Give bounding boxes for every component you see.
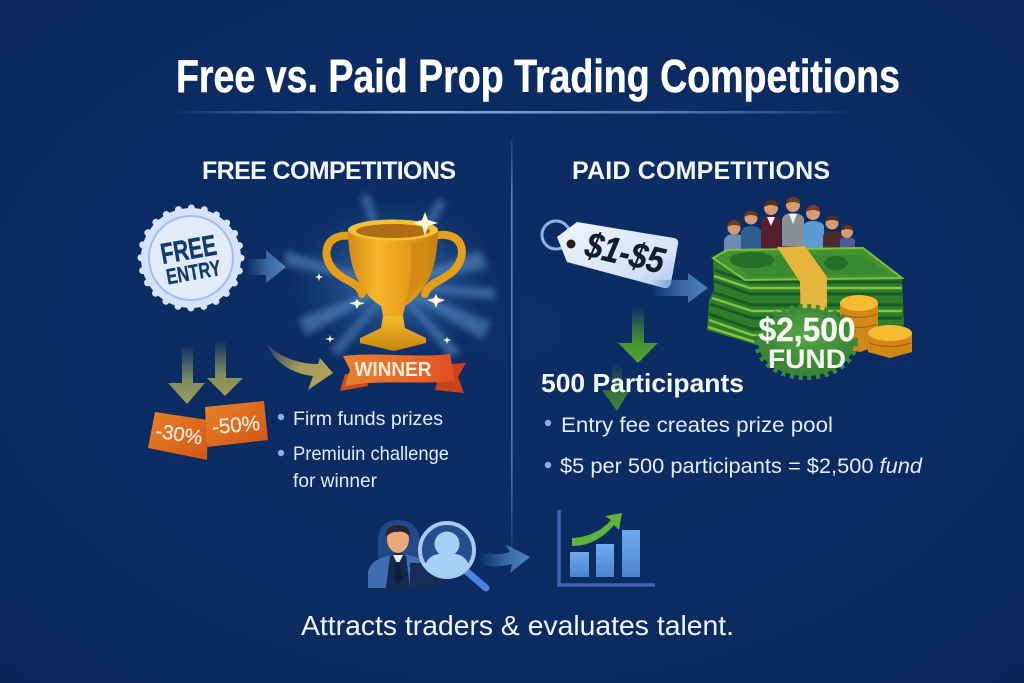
heading: free competitions: FREE COMPETITIONS	[202, 157, 456, 185]
caption: Attracts traders & evaluates talent.	[301, 610, 734, 641]
banner: winner	[340, 354, 466, 393]
trophy handles	[327, 236, 362, 294]
arrow: price tag to fund	[650, 273, 708, 303]
panel: free competitions	[141, 157, 498, 492]
heading: paid competitions: PAID COMPETITIONS	[572, 157, 830, 185]
icon: gold coins	[840, 295, 912, 358]
badge: 2500 fund: FUND	[768, 344, 846, 374]
footer flow	[301, 510, 734, 641]
tag: minus 50 percent	[205, 401, 268, 447]
bullet list: paid: $5 per 500 participants = $2,500 fund	[560, 454, 923, 478]
icon: magnifying glass	[420, 523, 486, 588]
icon: price tag: $1-$5	[581, 223, 670, 282]
arrow: trader to chart	[479, 544, 530, 573]
arrow: free entry to trophy	[246, 250, 286, 283]
trophy base	[360, 316, 426, 351]
panel: paid competitions	[541, 157, 923, 478]
icon: free entry badge: ENTRY	[164, 255, 223, 289]
bar chart	[559, 510, 655, 585]
bullet list: paid	[545, 413, 923, 478]
bullet list: paid: Entry fee creates prize pool	[561, 413, 833, 437]
trophy cup	[348, 229, 438, 325]
bullet list: free: Firm funds prizes	[293, 408, 443, 430]
bullet list: free: Premiuin challenge	[293, 443, 449, 465]
tag: minus 50 percent: -50%	[211, 412, 261, 439]
tag: minus 30 percent: -30%	[154, 420, 204, 450]
icon: free entry badge	[141, 208, 241, 308]
icon: trophy with rays	[285, 194, 498, 362]
growth arrow	[572, 513, 622, 546]
badge: 2500 fund	[758, 308, 856, 376]
bullet list: free	[278, 408, 449, 492]
sparkles	[315, 212, 451, 344]
arrow: curved to winner	[266, 343, 333, 390]
bullet list: free: for winner	[293, 470, 377, 492]
icon: trader	[368, 520, 442, 588]
icon: free entry badge: FREE	[158, 230, 219, 271]
arrows: green down	[602, 307, 658, 411]
icon: price tag	[542, 221, 678, 288]
tag: minus 30 percent	[148, 412, 208, 460]
heading: 500 participants: 500 Participants	[541, 368, 744, 398]
icon: stack of cash	[707, 246, 904, 346]
icon: crowd of participants	[724, 197, 855, 252]
banner: winner: WINNER	[354, 359, 432, 381]
arrows: down to discounts	[168, 340, 243, 404]
badge: 2500 fund: $2,500	[758, 311, 856, 348]
